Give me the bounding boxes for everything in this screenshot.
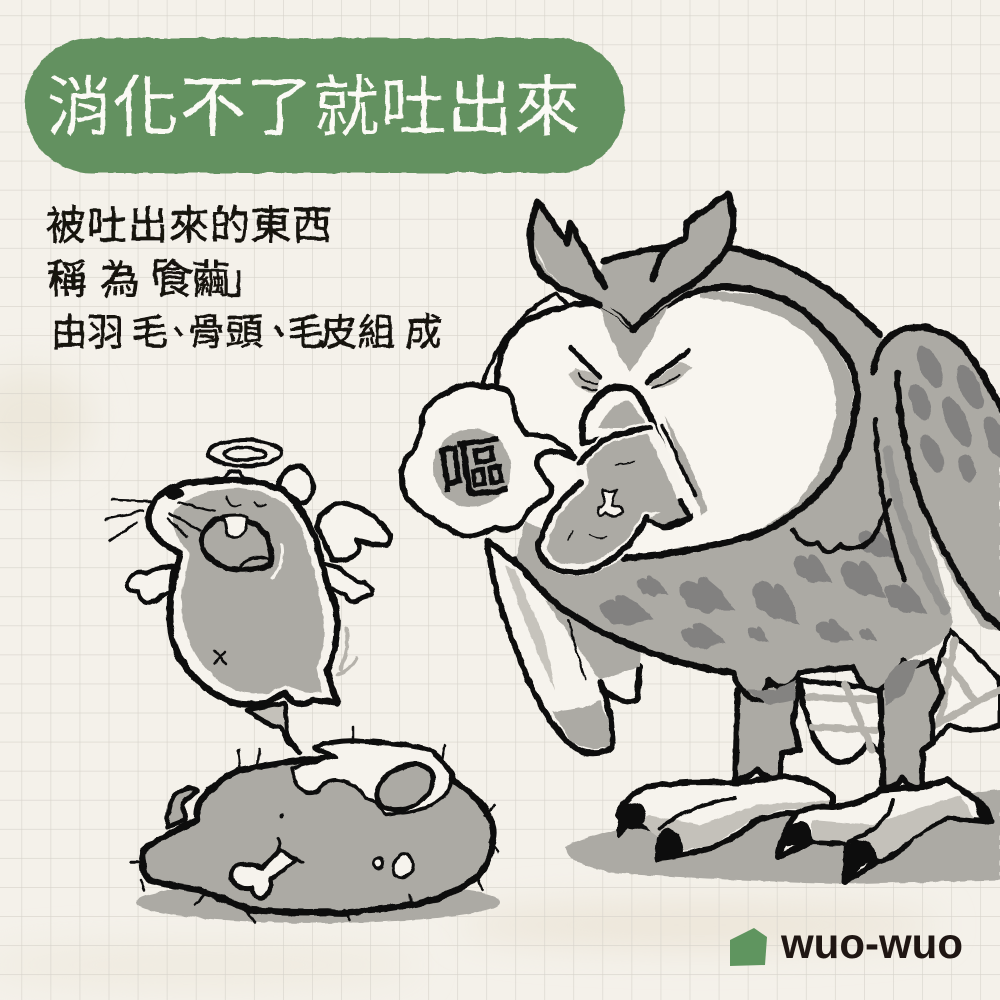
rat belly mark [214, 650, 226, 664]
logo house icon [730, 928, 767, 966]
green pill [25, 38, 625, 173]
rat nose [165, 487, 185, 499]
rat wing [317, 503, 390, 560]
pellet mass [142, 742, 494, 913]
rat ears [278, 466, 313, 503]
pellet skull [292, 742, 452, 815]
logo [730, 920, 963, 968]
thought bubble [402, 384, 575, 536]
description text: 由羽毛、骨頭、毛皮組成 [51, 312, 442, 353]
regurgitated pellet in beak [539, 427, 690, 572]
owl ground shadow [565, 790, 1000, 884]
wing spots [905, 342, 1000, 484]
small bone [598, 489, 623, 516]
pellet hairs and marks [130, 727, 498, 922]
rat arms [127, 567, 173, 603]
owl body and neck [515, 246, 953, 700]
owl tail feathers [800, 680, 890, 762]
owl forehead V patch [600, 306, 668, 372]
regurgitated pellet with skull and bone [130, 727, 498, 922]
rat grey fill [173, 488, 324, 694]
pellet bone [231, 850, 296, 898]
pellet rat tail [167, 788, 197, 827]
owl right wing [873, 327, 1000, 630]
owl chest spots [597, 523, 927, 662]
bubble text: 嘔 [433, 429, 511, 513]
rat body [148, 480, 338, 704]
bubble grey disc [433, 429, 511, 507]
description text [46, 204, 442, 353]
owl head outline [483, 293, 600, 400]
owl shoulder feather scallops [793, 500, 890, 552]
rat mouth [202, 518, 272, 570]
pellet small bones [373, 858, 383, 868]
title text: 消化不了就吐出來 [46, 70, 580, 144]
owl left foot [618, 777, 833, 860]
rat motion lines [337, 628, 356, 675]
owl face disk [496, 287, 857, 558]
owl ears [530, 193, 733, 330]
owl right leg [880, 660, 943, 788]
rat tail [247, 703, 300, 753]
title banner [25, 38, 625, 173]
owl right foot [778, 780, 992, 882]
owl left wing [487, 540, 640, 753]
owl beak [582, 387, 708, 527]
owl [402, 193, 1000, 882]
description text: 稱為「食繭」 [47, 258, 266, 302]
angel rat ghost [105, 440, 390, 753]
logo wordmark: wuo-wuo [780, 920, 963, 968]
rat closed eyes [226, 497, 266, 507]
description text: 被吐出來的東西 [46, 204, 332, 248]
owl eyes and brows [568, 348, 692, 392]
rat halo [208, 440, 282, 466]
rat whiskers [105, 500, 214, 541]
owl left leg [735, 680, 800, 782]
pellet ground shadow [136, 881, 500, 923]
